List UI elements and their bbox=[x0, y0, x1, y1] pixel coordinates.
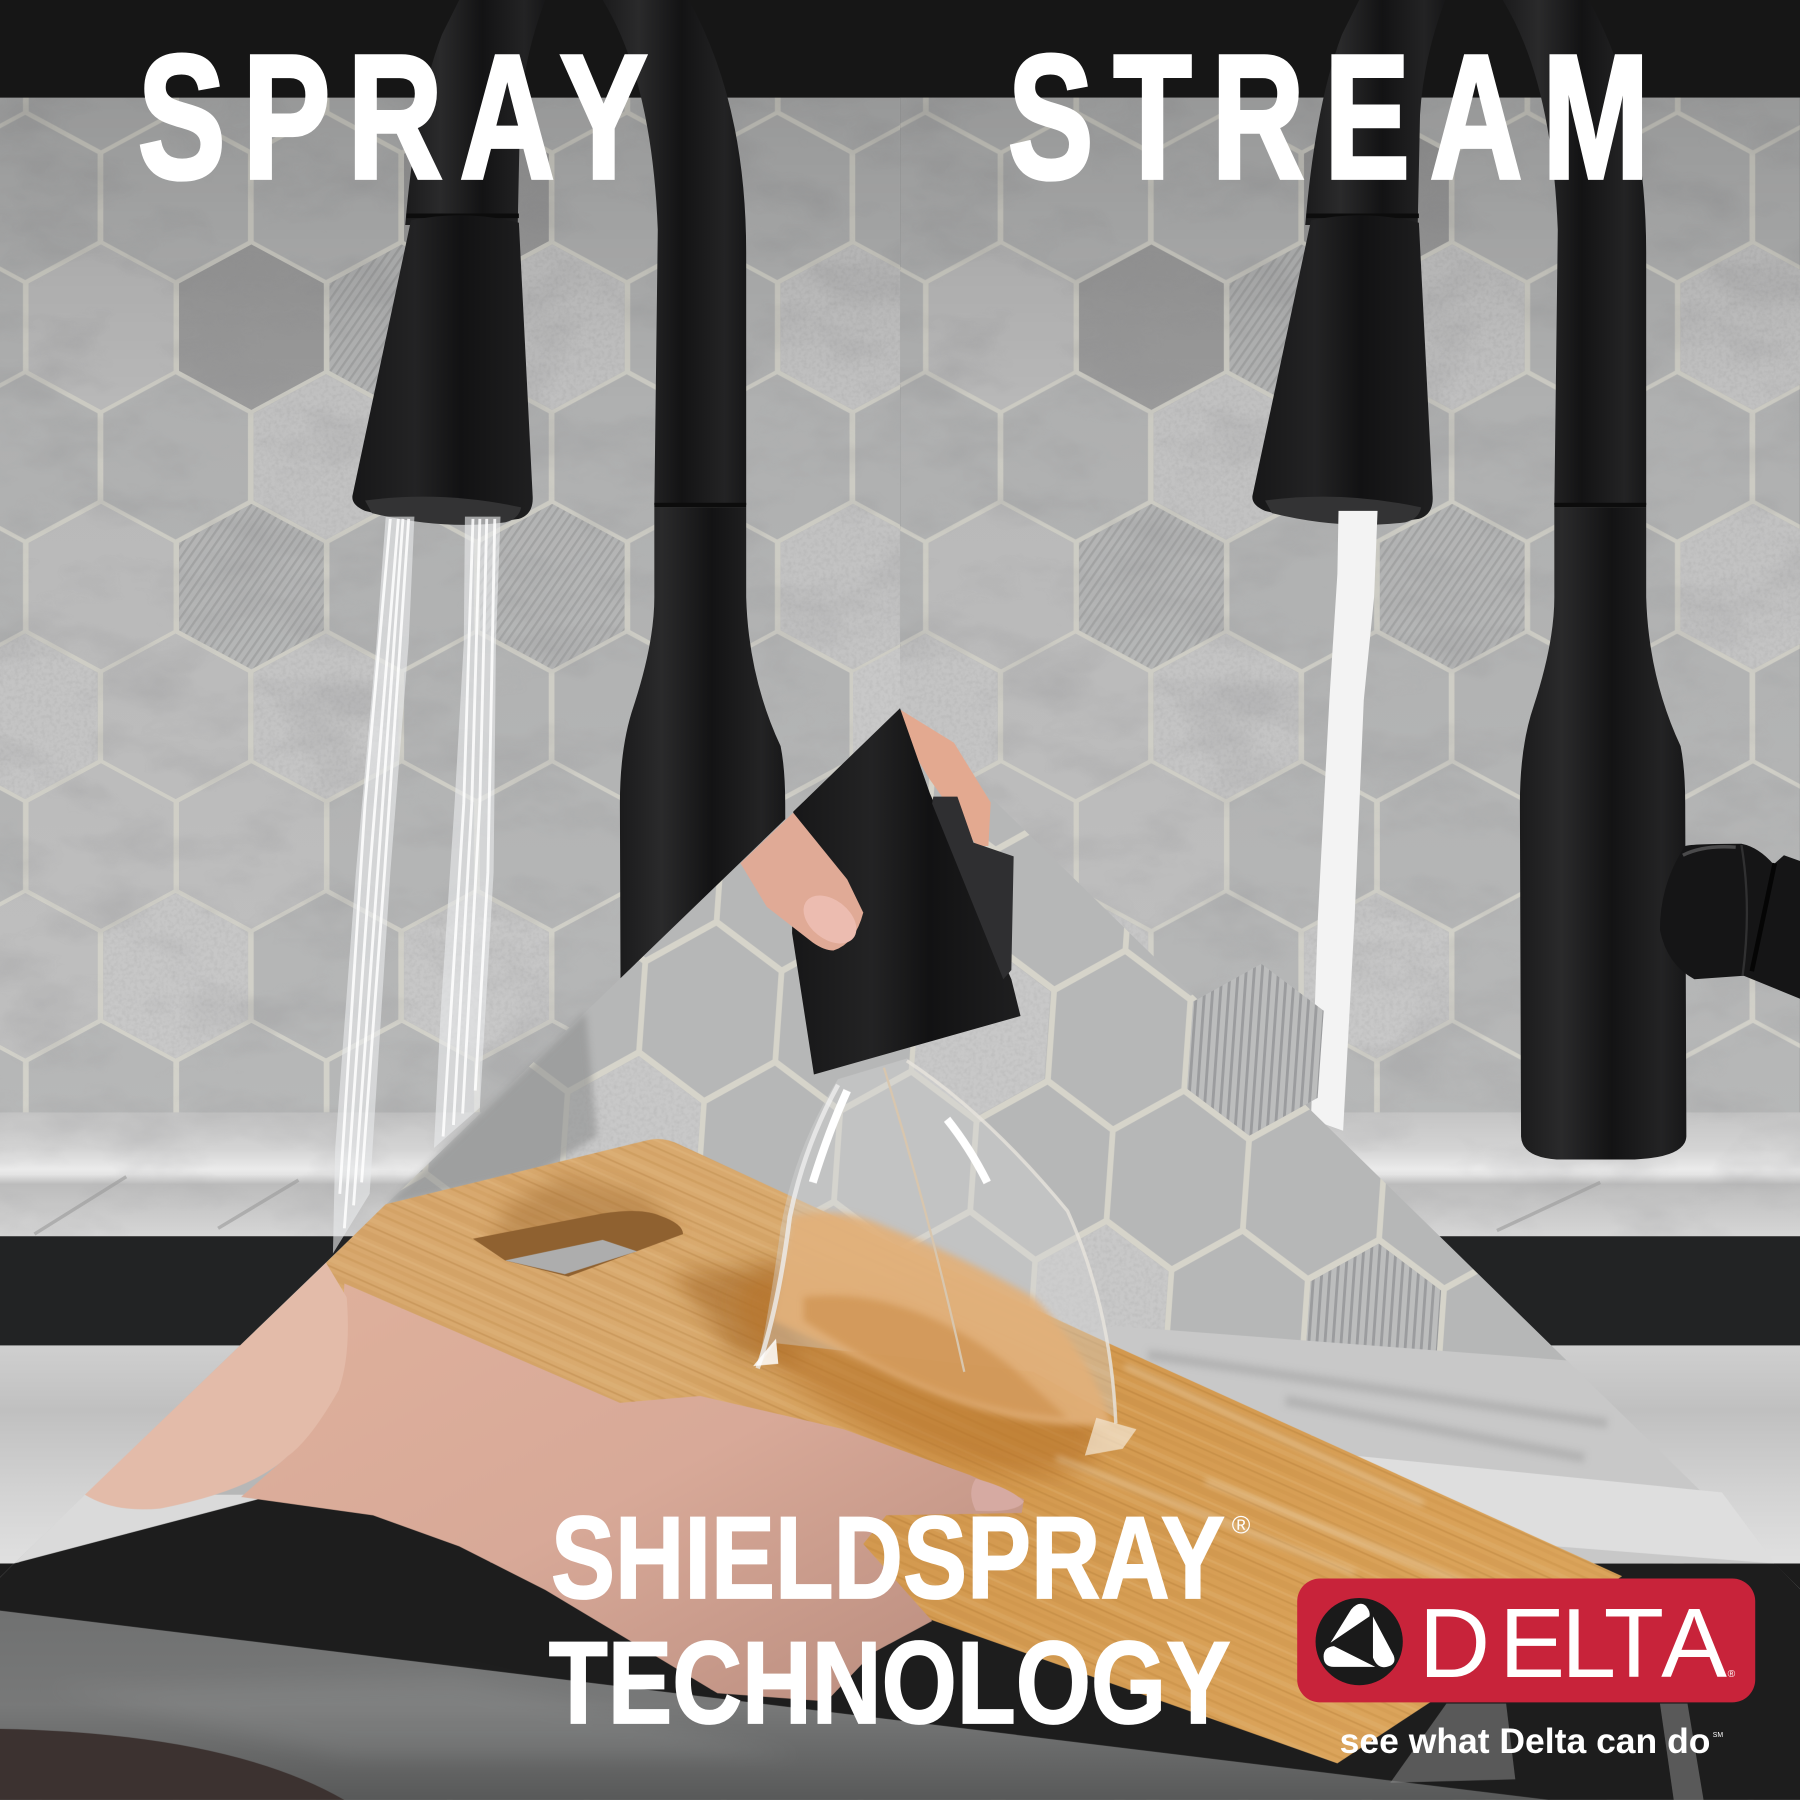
logo registered mark: ® bbox=[1728, 1669, 1736, 1680]
triangle tile wall bbox=[0, 708, 1800, 1800]
hand and arm bbox=[85, 1263, 1024, 1701]
faucet with handle bbox=[1252, 0, 1800, 1159]
dark sink below counter bbox=[0, 1492, 1800, 1800]
wordmark: DELTA bbox=[1419, 1588, 1727, 1698]
heading: SPRAY: SPRAY bbox=[138, 19, 665, 216]
faucet bbox=[352, 0, 900, 1159]
pull-down sprayer head with hand bbox=[740, 708, 1021, 1074]
logo: Delta bbox=[1297, 1578, 1755, 1702]
water: solid stream bbox=[1311, 511, 1378, 1131]
triangle counter bbox=[0, 1326, 1775, 1577]
water splash under logo bbox=[1390, 1704, 1704, 1800]
marble counters bbox=[900, 1112, 1800, 1800]
thumb bbox=[740, 813, 863, 951]
trigger bbox=[932, 797, 1014, 979]
triangle tile details bbox=[552, 916, 1463, 1420]
backsplash tile wall bbox=[0, 0, 925, 1119]
panel: stream (right half) bbox=[853, 0, 1800, 1800]
service mark: SM bbox=[1713, 1732, 1723, 1739]
water: two spray streams bbox=[333, 517, 501, 1254]
registered mark: ® bbox=[1232, 1512, 1251, 1540]
logo emblem bbox=[1316, 1598, 1403, 1685]
foreground marble bbox=[0, 1611, 1550, 1800]
water dome bbox=[753, 1058, 1136, 1456]
title: Technology: TECHNOLOGY bbox=[549, 1617, 1231, 1748]
sprayer body bbox=[792, 708, 1021, 1074]
logo background bbox=[1297, 1578, 1755, 1702]
board handle hole bbox=[473, 1211, 683, 1277]
marble counters bbox=[0, 1112, 900, 1800]
backsplash tile wall bbox=[853, 0, 1800, 1119]
cutting board bbox=[326, 1139, 1622, 1763]
title: ShieldSpray: SHIELDSPRAY bbox=[551, 1492, 1225, 1623]
tagline: see what Delta can do bbox=[1340, 1721, 1710, 1761]
panel: ShieldSpray triangle scene bbox=[0, 708, 1800, 1800]
fingernail bbox=[971, 1479, 1024, 1511]
panel: spray (left half) bbox=[0, 0, 925, 1800]
darker wall wedge at left of triangle bbox=[388, 1012, 597, 1204]
thumbnail bbox=[794, 886, 866, 953]
back fingers bbox=[900, 709, 991, 846]
